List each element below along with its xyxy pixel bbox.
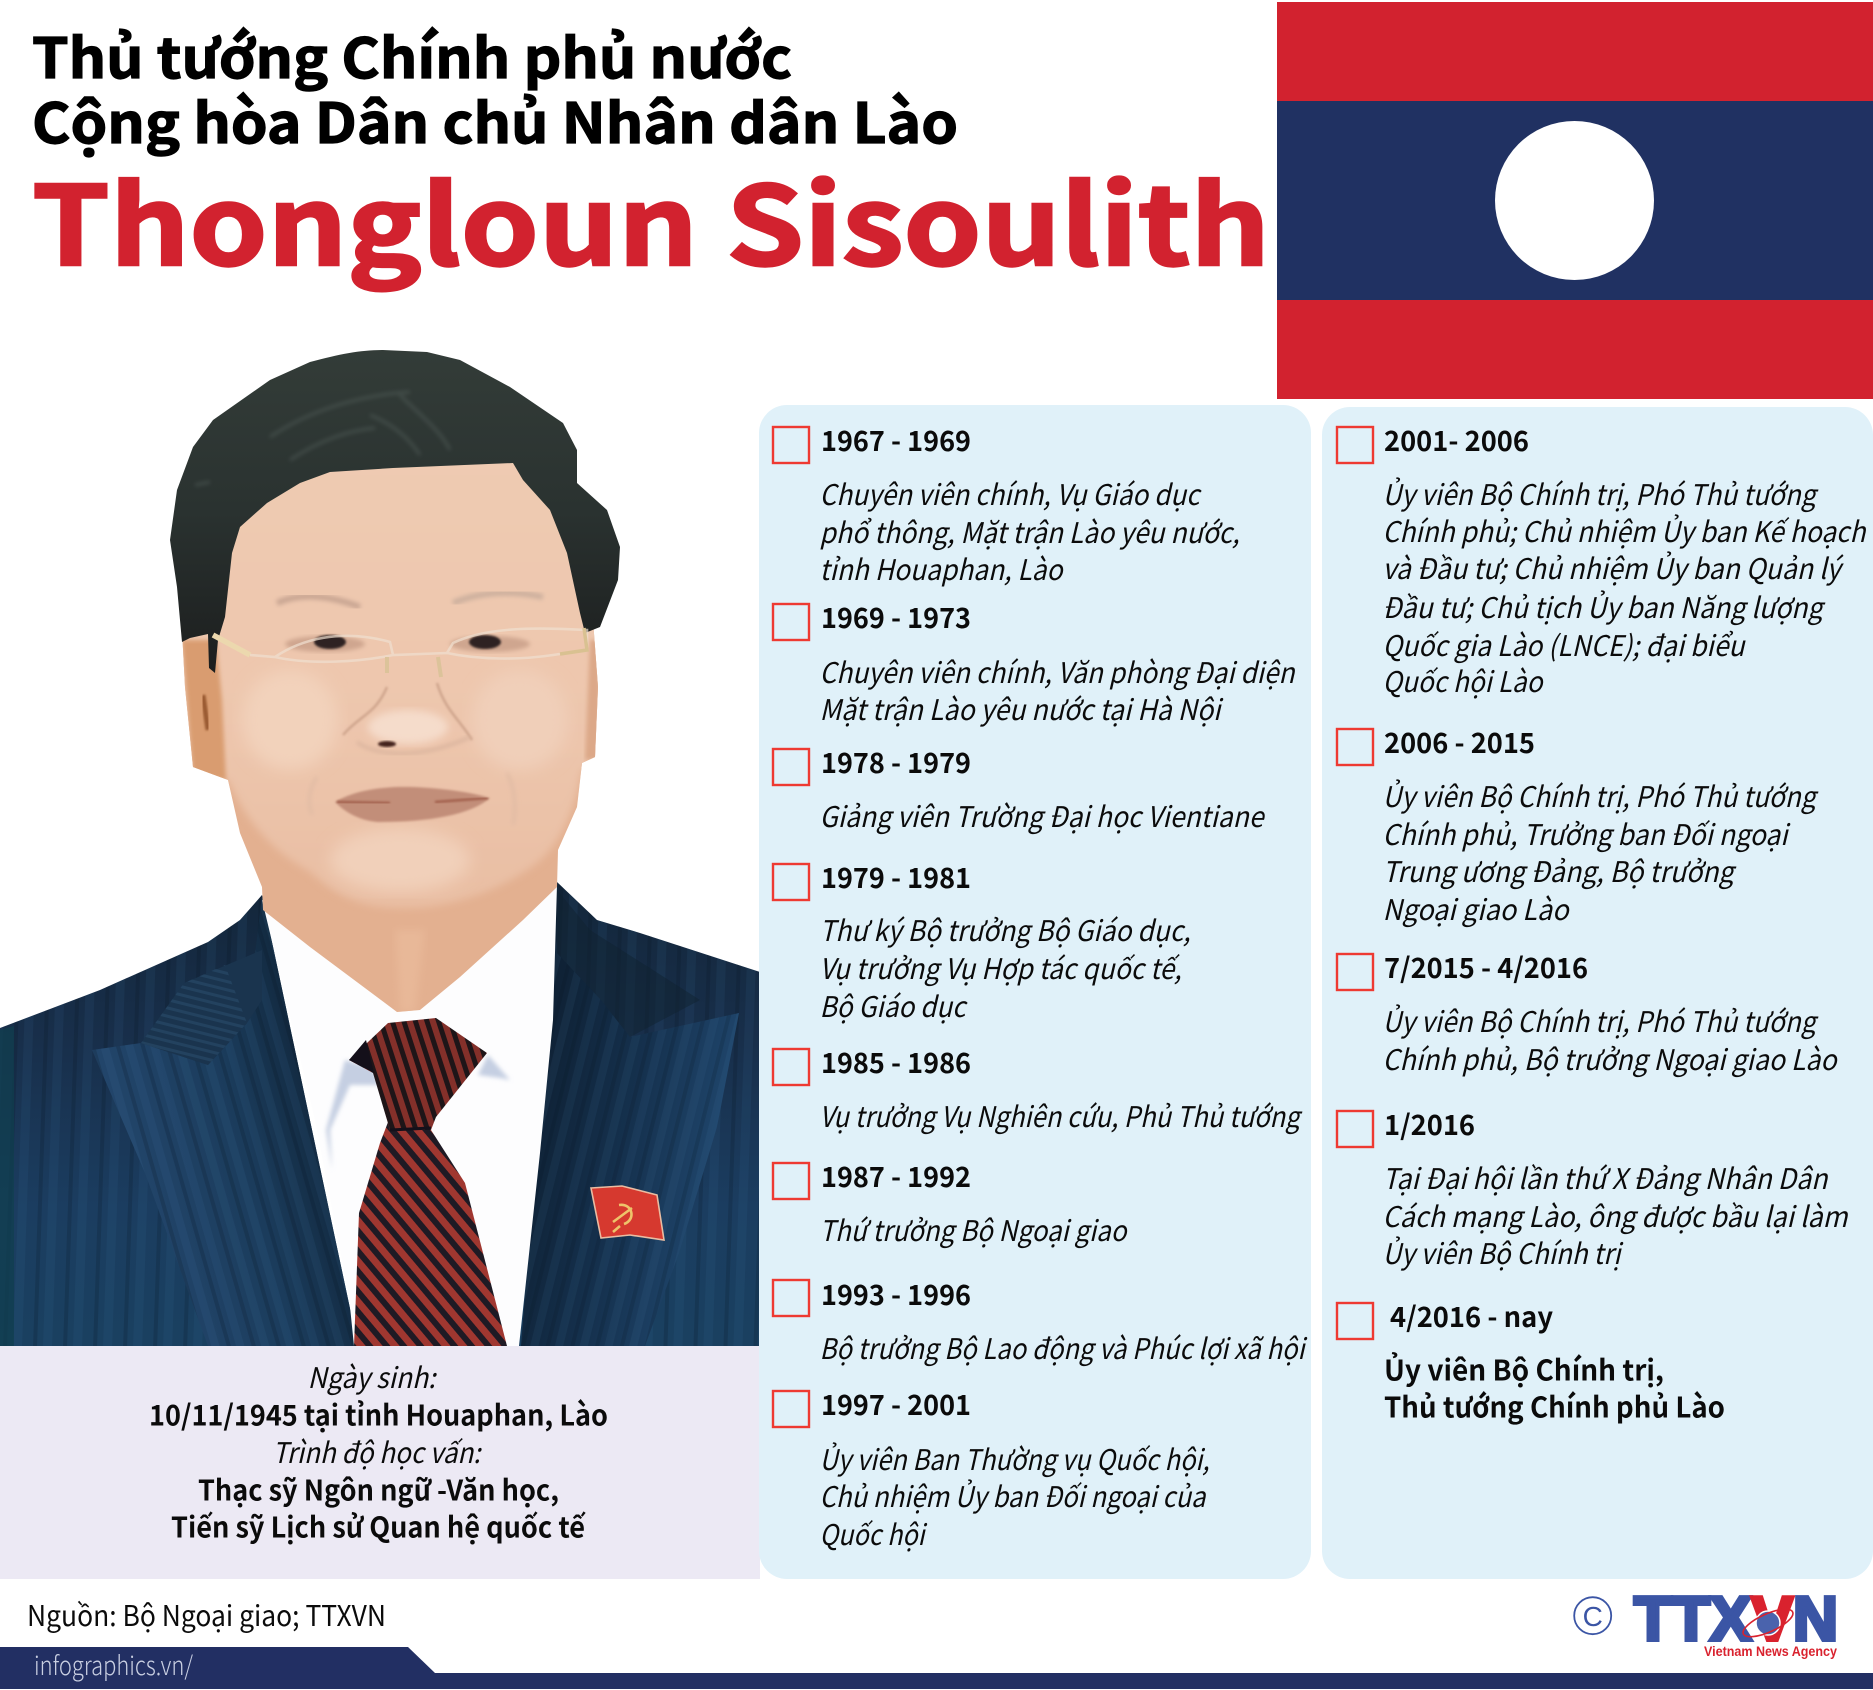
entry 1985-1986: 1985 - 1986 (821, 1042, 971, 1082)
entry 1987-1992: Thứ trưởng Bộ Ngoại giao (820, 1209, 1128, 1250)
entry 2006-2015: Ủy viên Bộ Chính trị, Phó Thủ tướng (1382, 775, 1819, 816)
entry 1969-1973: Mặt trận Lào yêu nước tại Hà Nội (820, 688, 1224, 729)
entry 7/2015-4/2016 (1337, 947, 1838, 1079)
entry 1993-1996 (773, 1274, 1308, 1368)
entry 1978-1979: 1978 - 1979 (821, 742, 971, 782)
entry 1/2016 (1337, 1104, 1849, 1273)
entry 1979-1981: Bộ Giáo dục (820, 985, 968, 1026)
entry 2001-2006: 2001- 2006 (1384, 420, 1529, 460)
entry 1978-1979 (773, 742, 1266, 836)
entry 1967-1969: tỉnh Houaphan, Lào (820, 548, 1064, 589)
entry 2001-2006: Ủy viên Bộ Chính trị, Phó Thủ tướng (1382, 473, 1819, 514)
source line: Nguồn: Bộ Ngoại giao; TTXVN (27, 1594, 386, 1635)
entry 1987-1992 (773, 1156, 1128, 1250)
face and neck (182, 463, 598, 1012)
entry 1978-1979: Giảng viên Trường Đại học Vientiane (820, 795, 1266, 836)
entry 1997-2001 (773, 1384, 1210, 1554)
text: birth and education: Tiến sỹ Lịch sử Quan hệ quốc tế (171, 1506, 586, 1546)
entry 1/2016: Cách mạng Lào, ông được bầu lại làm (1382, 1195, 1849, 1236)
jacket (0, 882, 760, 1346)
heading: position title (32, 14, 958, 159)
hair (170, 350, 620, 673)
panel: career timeline 1967-2001 (759, 405, 1311, 1579)
entry 7/2015-4/2016: 7/2015 - 4/2016 (1384, 947, 1588, 987)
entry 1967-1969: Chuyên viên chính, Vụ Giáo dục (820, 473, 1202, 514)
entry 1997-2001: Quốc hội (820, 1513, 928, 1554)
entry 1/2016: Tại Đại hội lần thứ X Đảng Nhân Dân (1382, 1157, 1829, 1198)
entry 1969-1973: 1969 - 1973 (821, 597, 971, 637)
icon: copyright: C (1583, 1601, 1603, 1632)
entry 2001-2006: và Đầu tư; Chủ nhiệm Ủy ban Quản lý (1382, 547, 1844, 588)
logo: TTXVN Vietnam News Agency: TTXVN (1634, 1585, 1838, 1654)
entry 1985-1986: Vụ trưởng Vụ Nghiên cứu, Phủ Thủ tướng (820, 1095, 1303, 1136)
entry 2001-2006 (1337, 420, 1867, 701)
entry 1/2016: Ủy viên Bộ Chính trị (1382, 1232, 1624, 1273)
entry 1997-2001: Chủ nhiệm Ủy ban Đối ngoại của (820, 1475, 1207, 1516)
logo: TTXVN Vietnam News Agency: Vietnam News Agency (1704, 1644, 1837, 1659)
icon: flag of Laos (1277, 2, 1873, 399)
panel: career timeline 2001-present (1322, 407, 1873, 1579)
text: birth and education: Ngày sinh: (308, 1356, 437, 1397)
footer bar (0, 1646, 1873, 1689)
entry 1993-1996: Bộ trưởng Bộ Lao động và Phúc lợi xã hội (820, 1327, 1308, 1368)
entry 1969-1973 (773, 597, 1296, 729)
text: birth and education (149, 1356, 608, 1546)
entry 4/2016-present: 4/2016 - nay (1390, 1296, 1553, 1336)
entry 2001-2006: Đầu tư; Chủ tịch Ủy ban Năng lượng (1382, 586, 1826, 627)
entry 2006-2015: Chính phủ, Trưởng ban Đối ngoại (1382, 813, 1791, 854)
entry 4/2016-present (1337, 1296, 1725, 1426)
entry 4/2016-present: Ủy viên Bộ Chính trị, (1384, 1348, 1664, 1390)
entry 2006-2015: 2006 - 2015 (1384, 722, 1535, 762)
lapel pin flag (591, 1186, 664, 1240)
entry 1967-1969: phổ thông, Mặt trận Lào yêu nước, (820, 511, 1240, 552)
entry 7/2015-4/2016: Chính phủ, Bộ trưởng Ngoại giao Lào (1382, 1038, 1838, 1079)
entry 2006-2015 (1337, 722, 1819, 929)
heading: position title: Thủ tướng Chính phủ nước (32, 14, 792, 94)
entry 4/2016-present: Thủ tướng Chính phủ Lào (1384, 1386, 1725, 1426)
eyes, brows, nose, mouth (277, 593, 543, 825)
entry 1969-1973: Chuyên viên chính, Văn phòng Đại diện (820, 651, 1296, 692)
entry 7/2015-4/2016: Ủy viên Bộ Chính trị, Phó Thủ tướng (1382, 1000, 1819, 1041)
entry 1997-2001: 1997 - 2001 (821, 1384, 971, 1424)
panel: personal details (0, 1346, 760, 1579)
entry 1979-1981: 1979 - 1981 (821, 857, 971, 897)
entry 1979-1981: Vụ trưởng Vụ Hợp tác quốc tế, (820, 947, 1182, 988)
entry 1967-1969 (773, 420, 1240, 589)
entry 1987-1992: 1987 - 1992 (821, 1156, 971, 1196)
shirt (262, 885, 557, 1346)
entry 1967-1969: 1967 - 1969 (821, 420, 971, 460)
portrait photo illustration (0, 350, 760, 1346)
entry 2001-2006: Quốc hội Lào (1382, 660, 1544, 701)
entry 2006-2015: Ngoại giao Lào (1382, 888, 1570, 929)
entry 1993-1996: 1993 - 1996 (821, 1274, 971, 1314)
entry 1997-2001: Ủy viên Ban Thường vụ Quốc hội, (820, 1438, 1210, 1479)
heading: name: Thongloun Sisoulith (32, 140, 1270, 297)
text: birth and education: Thạc sỹ Ngôn ngữ -Văn học, (198, 1468, 559, 1510)
text: birth and education: Trình độ học vấn: (272, 1431, 482, 1472)
entry 1985-1986 (773, 1042, 1303, 1136)
heading: position title: Cộng hòa Dân chủ Nhân dân Lào (32, 79, 958, 159)
entry 1979-1981 (773, 857, 1190, 1026)
text: birth and education: 10/11/1945 tại tỉnh Houaphan, Lào (149, 1394, 608, 1434)
entry 2006-2015: Trung ương Đảng, Bộ trưởng (1382, 850, 1737, 891)
entry 2001-2006: Quốc gia Lào (LNCE); đại biểu (1382, 624, 1746, 665)
tie (349, 1018, 507, 1346)
footer website text: infographics.vn/ (34, 1646, 194, 1683)
glasses (213, 628, 587, 677)
entry 1979-1981: Thư ký Bộ trưởng Bộ Giáo dục, (820, 909, 1190, 950)
icon: copyright (1574, 1597, 1611, 1634)
entry 1/2016: 1/2016 (1384, 1104, 1475, 1144)
